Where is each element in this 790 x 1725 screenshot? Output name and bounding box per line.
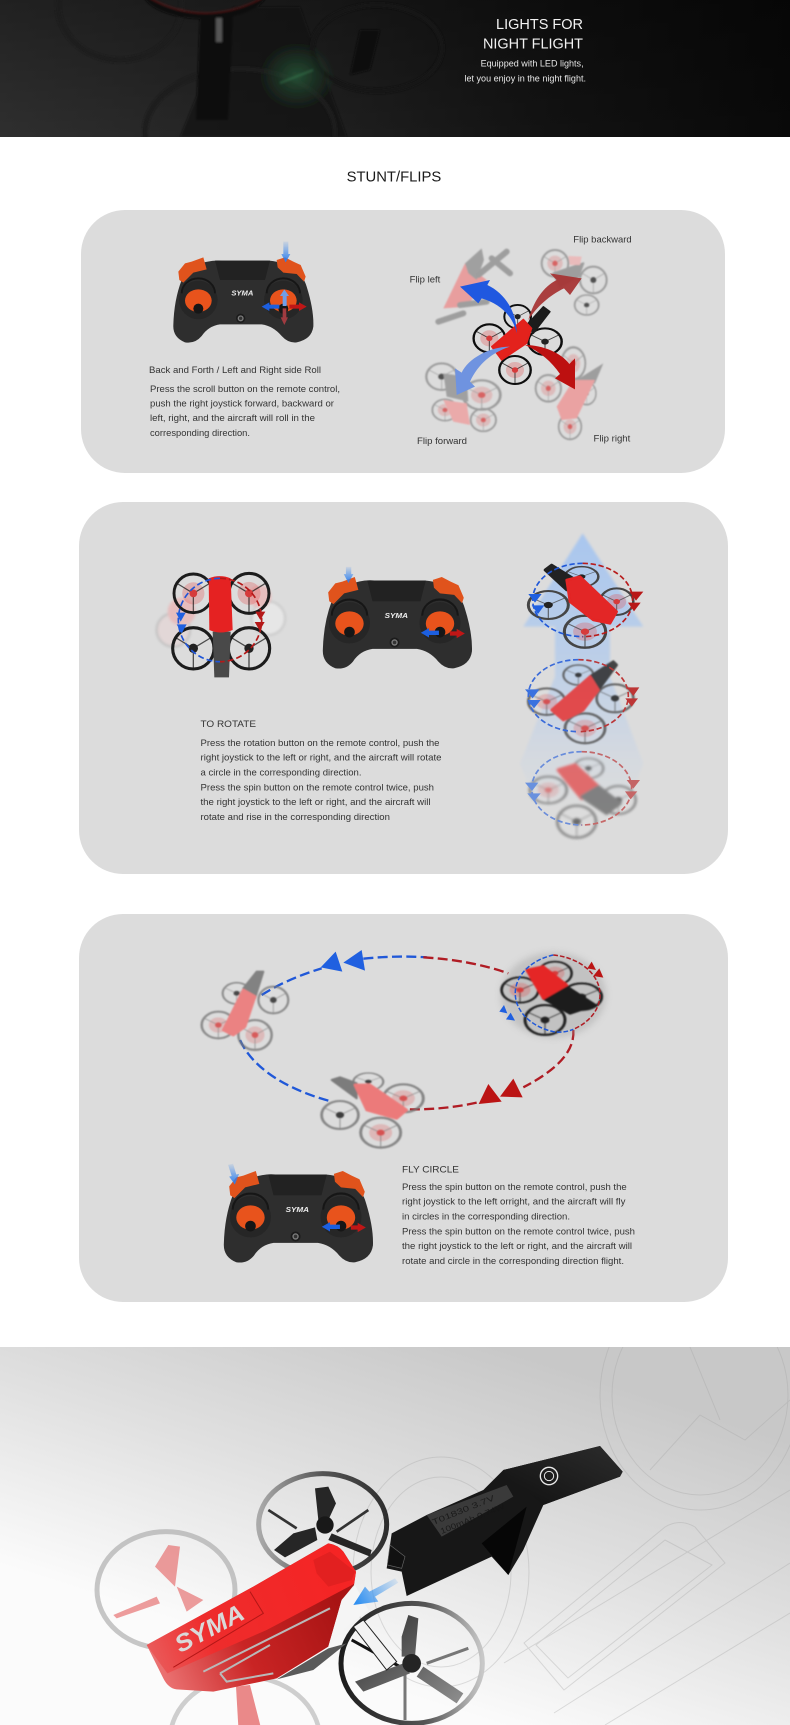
text: back and forth roll: Press the scroll button on the remote control,	[150, 384, 340, 395]
text: fly circle	[402, 1165, 635, 1267]
hero title: LIGHTS FOR	[496, 17, 583, 33]
arrow: flip backward	[528, 273, 582, 320]
text: to rotate	[200, 719, 442, 823]
hero title: NIGHT FLIGHT	[483, 37, 583, 53]
text: to rotate: Press the spin button on the remote control twice, push	[200, 782, 434, 793]
hero title	[484, 19, 583, 48]
text: fly circle: rotate and circle in the corresponding direction flight.	[402, 1256, 624, 1267]
hero: lights for night flight	[0, 0, 790, 137]
left rotor	[97, 1532, 235, 1648]
white arm	[353, 1620, 397, 1670]
arrow: flip forward	[455, 347, 510, 395]
hero dark background	[0, 0, 790, 137]
battery label	[432, 1495, 496, 1534]
panel: flips	[81, 210, 725, 473]
remote control: SYMA	[286, 1205, 309, 1214]
drone bottom	[322, 1073, 423, 1148]
faint blueprint lines	[352, 1347, 790, 1725]
flip labels	[410, 235, 632, 447]
text: fly circle: Press the spin button on the remote control twice, push	[402, 1226, 635, 1237]
battery logo	[540, 1467, 558, 1485]
text: fly circle: Press the spin button on the remote control, push the	[402, 1182, 627, 1193]
drone bottom	[525, 752, 640, 838]
ghost drone: flip forward	[426, 363, 500, 431]
panel background	[81, 210, 725, 473]
flight path	[240, 957, 573, 1109]
arrow: flip left	[460, 280, 517, 333]
flip diagram	[426, 248, 607, 439]
right lower rotor	[341, 1603, 482, 1723]
gradient background	[0, 1347, 790, 1725]
text: to rotate: right joystick to the left or right, and the aircraft will rotate	[200, 753, 442, 764]
remote control	[323, 567, 472, 669]
text: to rotate: the right joystick to the left or right, and the aircraft will	[200, 797, 430, 808]
text: to rotate: TO ROTATE	[200, 719, 256, 730]
text: fly circle: in circles in the corresponding direction.	[402, 1211, 570, 1222]
battery label: 100mAh 0.74W	[439, 1502, 506, 1536]
drone top	[528, 565, 633, 648]
blue up arrows	[520, 533, 643, 823]
bottom rotor	[170, 1677, 320, 1725]
text: fly circle: right joystick to the left orright, and the aircraft will fly	[402, 1197, 626, 1208]
drone middle	[525, 660, 639, 743]
flip labels: Flip backward	[573, 235, 632, 246]
rotation circle	[178, 578, 220, 662]
text: back and forth roll: Back and Forth / Left and Right side Roll	[149, 365, 321, 376]
battery pack	[387, 1446, 623, 1596]
remote control with joystick arrows: SYMA	[231, 291, 253, 298]
hero description	[465, 60, 586, 84]
panel: battery install photo	[0, 1347, 790, 1725]
panel background	[79, 502, 728, 874]
logo: SYMA	[170, 1600, 249, 1659]
text: back and forth roll: push the right joystick forward, backward or	[150, 398, 334, 410]
battery label: T01830 3.7V	[431, 1493, 497, 1527]
drone left	[202, 972, 288, 1050]
rotation circle top	[533, 563, 633, 637]
arrow: flip right	[525, 345, 575, 389]
text: fly circle: the right joystick to the left or right, and the aircraft will	[402, 1241, 632, 1252]
text: back and forth roll	[149, 365, 340, 439]
ghost drone: flip backward	[542, 250, 607, 315]
panel: fly circle	[79, 914, 728, 1302]
text: to rotate: Press the rotation button on the remote control, push the	[200, 738, 440, 749]
heading: stunt/flips: STUNT/FLIPS	[347, 170, 441, 186]
white bay	[328, 1586, 360, 1646]
flip labels: Flip right	[594, 434, 631, 445]
remote control: SYMA	[385, 611, 408, 620]
dark belly	[277, 1643, 347, 1679]
text: back and forth roll: left, right, and the aircraft will roll in the	[150, 413, 315, 424]
flight path arrowheads	[321, 950, 365, 972]
text: back and forth roll: corresponding direction.	[150, 428, 250, 439]
center drone	[474, 305, 562, 384]
remote control	[224, 1164, 373, 1263]
top rotor	[259, 1474, 387, 1575]
panel: to rotate	[79, 502, 728, 874]
remote control with joystick arrows	[173, 242, 313, 343]
text: fly circle: FLY CIRCLE	[402, 1165, 459, 1176]
flip labels: Flip left	[410, 275, 441, 286]
panel background	[79, 914, 728, 1302]
red body	[147, 1543, 356, 1692]
top-view spinning drone	[157, 573, 285, 677]
hero description: Equipped with LED lights,	[481, 59, 584, 70]
ghost drone: flip left	[438, 248, 510, 322]
text: to rotate: a circle in the corresponding direction.	[200, 767, 362, 778]
motion ghost	[157, 585, 285, 647]
circular flight diagram	[202, 950, 606, 1148]
hero description: let you enjoy in the night flight.	[464, 74, 586, 85]
flip labels: Flip forward	[417, 436, 467, 447]
hero drone silhouette	[76, 0, 380, 137]
ghost drone: flip right	[536, 347, 603, 439]
text: to rotate: rotate and rise in the corresponding direction	[200, 812, 390, 823]
blue insertion arrow	[353, 1578, 398, 1605]
rising spin diagram	[520, 533, 643, 838]
spinning drone top right	[499, 952, 606, 1038]
drone with battery bay	[97, 1474, 482, 1725]
